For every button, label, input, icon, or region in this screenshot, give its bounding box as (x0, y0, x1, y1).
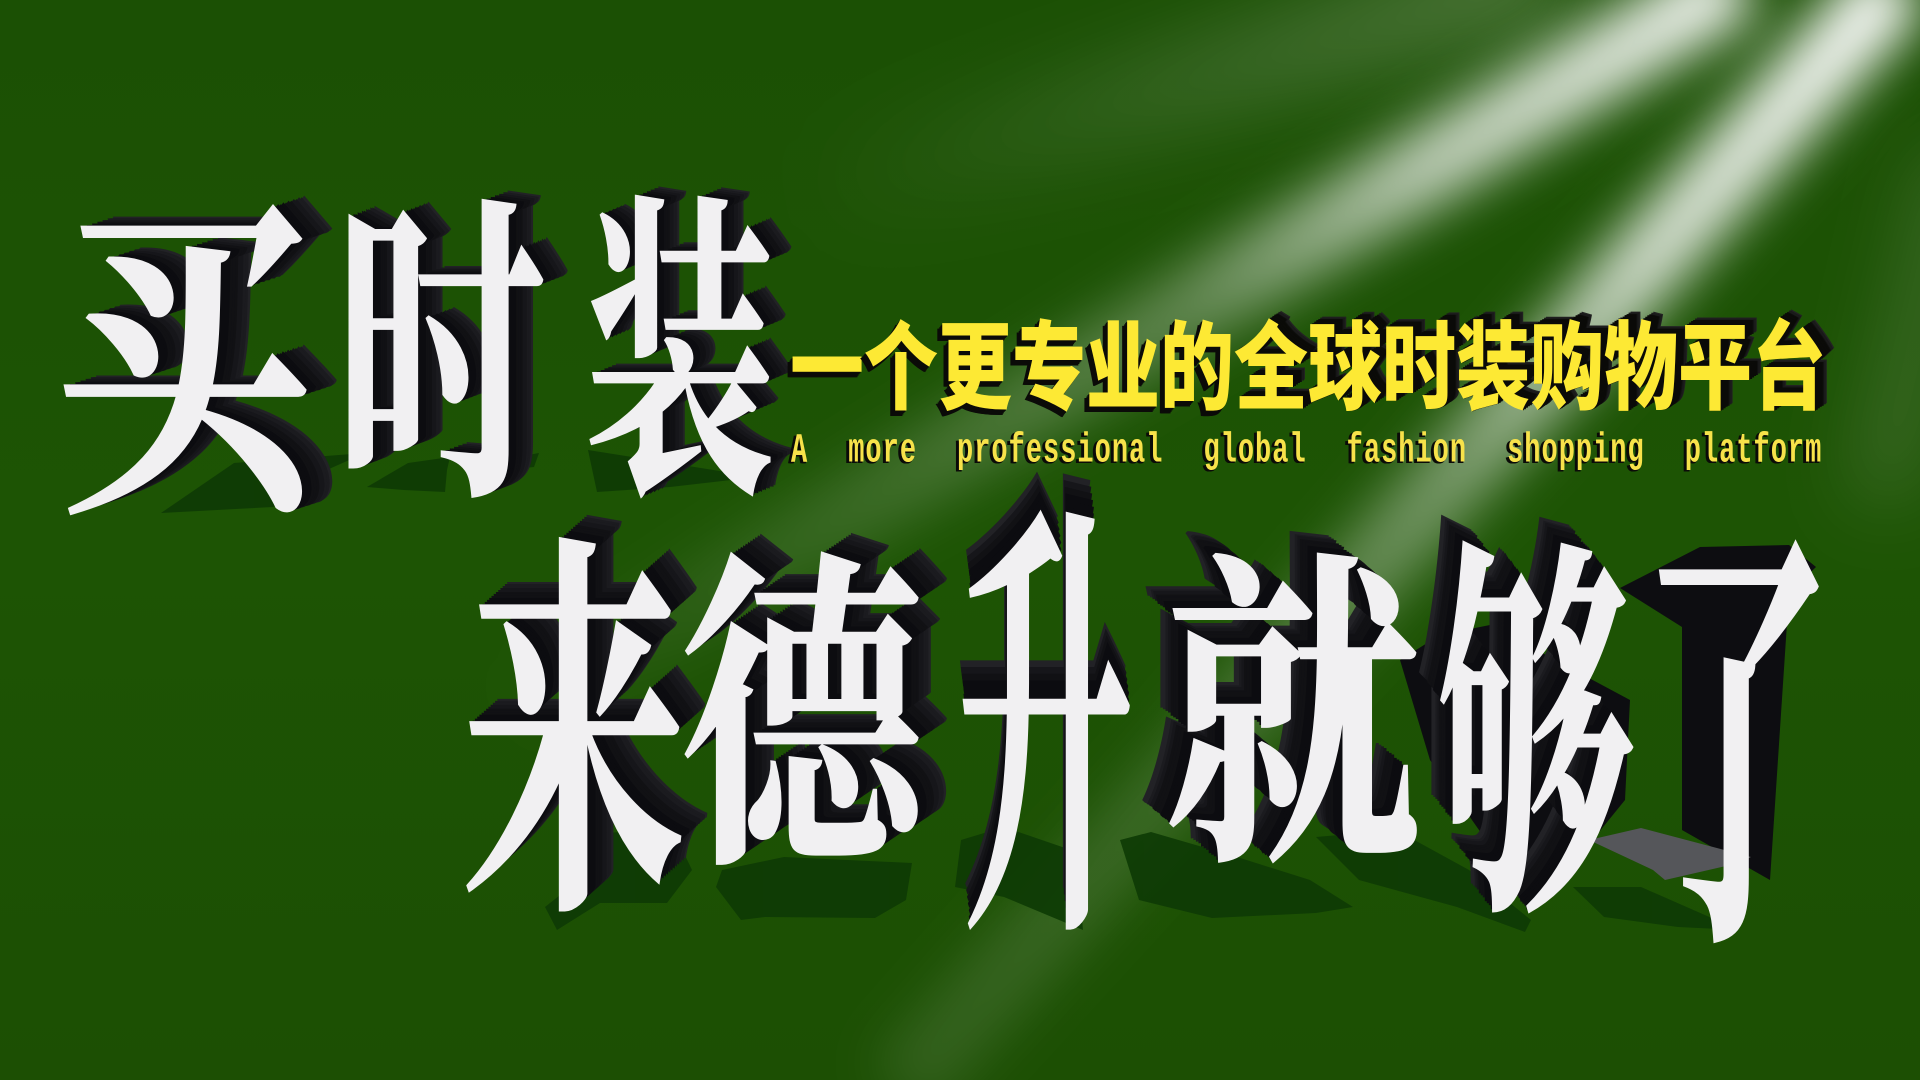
yellow Chinese tagline: 个 (864, 314, 938, 422)
yellow Chinese tagline (788, 310, 1834, 422)
glyph 来: 来 (462, 524, 686, 962)
glyph 了: 了 (1640, 514, 1832, 1000)
yellow Chinese tagline: 平 (1678, 314, 1752, 422)
yellow Chinese tagline: 购 (1530, 314, 1604, 422)
glyph 德: 德 (680, 542, 924, 906)
glyph 装: 装 (585, 184, 775, 538)
glyph 就: 就 (1165, 542, 1421, 904)
yellow Chinese tagline: 物 (1604, 314, 1678, 422)
main slogan line 1: 买时装 (52, 181, 792, 557)
yellow Chinese tagline: 更 (938, 314, 1012, 422)
glyph 买: 买 (52, 181, 312, 557)
English tagline: A more professional global fashion shopping platform (791, 429, 1822, 476)
glyph 够: 够 (1435, 528, 1635, 962)
yellow Chinese tagline: 专 (1012, 314, 1086, 422)
yellow Chinese tagline: 时 (1382, 314, 1456, 422)
yellow Chinese tagline: 全 (1234, 314, 1308, 422)
yellow Chinese tagline: 装 (1456, 314, 1530, 422)
yellow Chinese tagline: 的 (1160, 314, 1234, 422)
yellow Chinese tagline: 业 (1086, 314, 1160, 422)
yellow Chinese tagline: 台 (1752, 314, 1826, 422)
yellow Chinese tagline: 一 (790, 314, 864, 422)
glyph 升: 升 (958, 493, 1134, 986)
main slogan line 2: 来德升就够了 (462, 472, 1832, 1000)
yellow Chinese tagline: 球 (1308, 314, 1382, 422)
glyph 时: 时 (335, 184, 545, 538)
